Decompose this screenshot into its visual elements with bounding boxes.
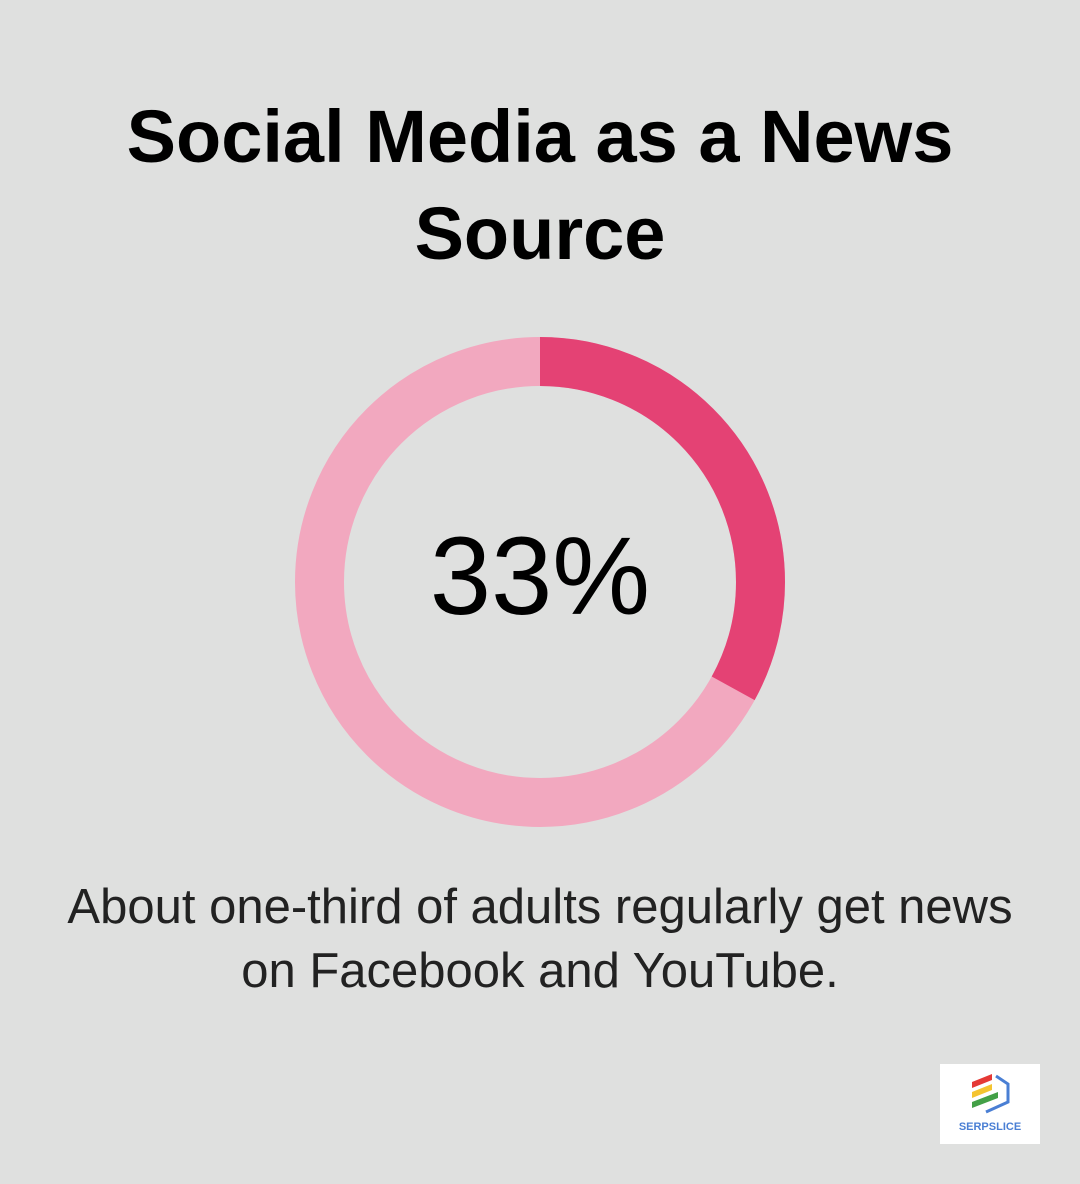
title: Social Media as a News: [127, 95, 953, 178]
logo: SERPSLICE: [959, 1121, 1021, 1133]
caption: on Facebook and YouTube.: [241, 944, 839, 998]
logo: [940, 1064, 1040, 1144]
title: [127, 95, 953, 275]
donut chart: 33%: [430, 515, 650, 638]
caption: About one-third of adults regularly get news: [67, 880, 1013, 934]
caption: [67, 880, 1013, 998]
title: Source: [415, 192, 665, 275]
